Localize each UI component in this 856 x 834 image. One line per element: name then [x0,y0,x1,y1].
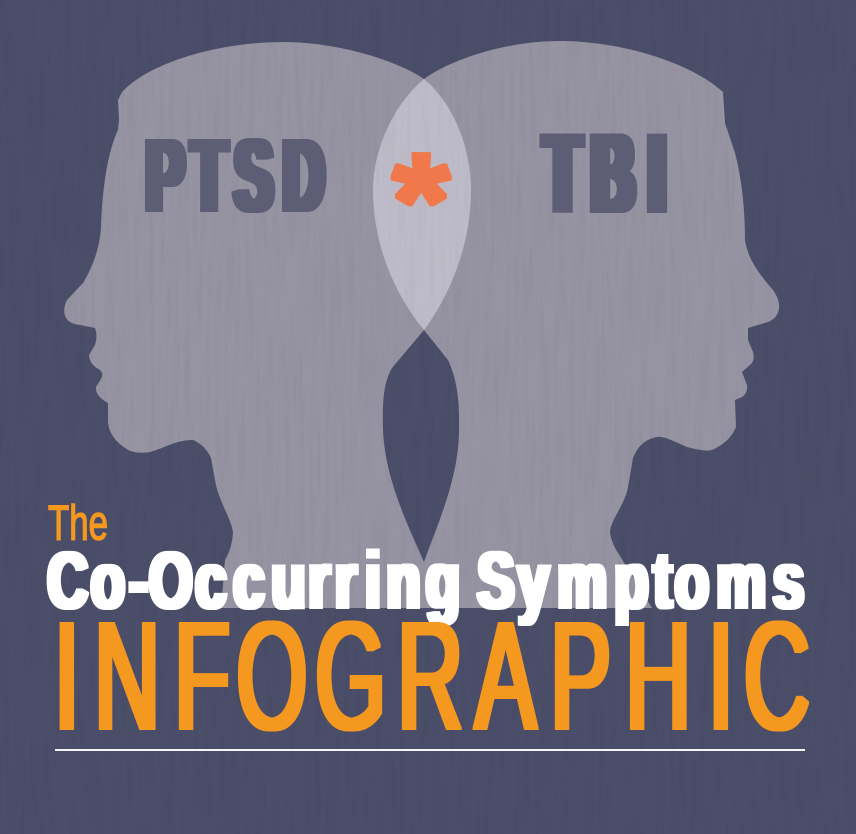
title: INFOGRAPHIC: INFOGRAPHIC [54,590,810,762]
title: The: The [48,496,108,550]
left head silhouette [64,42,471,608]
label: PTSD: PTSD [146,118,324,233]
icon: orange asterisk: * [392,125,451,276]
overlap lens between heads [373,79,471,330]
label: TBI: TBI [545,110,665,236]
head silhouettes [64,41,779,608]
title: Co-Occurring Symptoms: Co-Occurring Symptoms [47,535,804,625]
right head silhouette [373,41,779,608]
